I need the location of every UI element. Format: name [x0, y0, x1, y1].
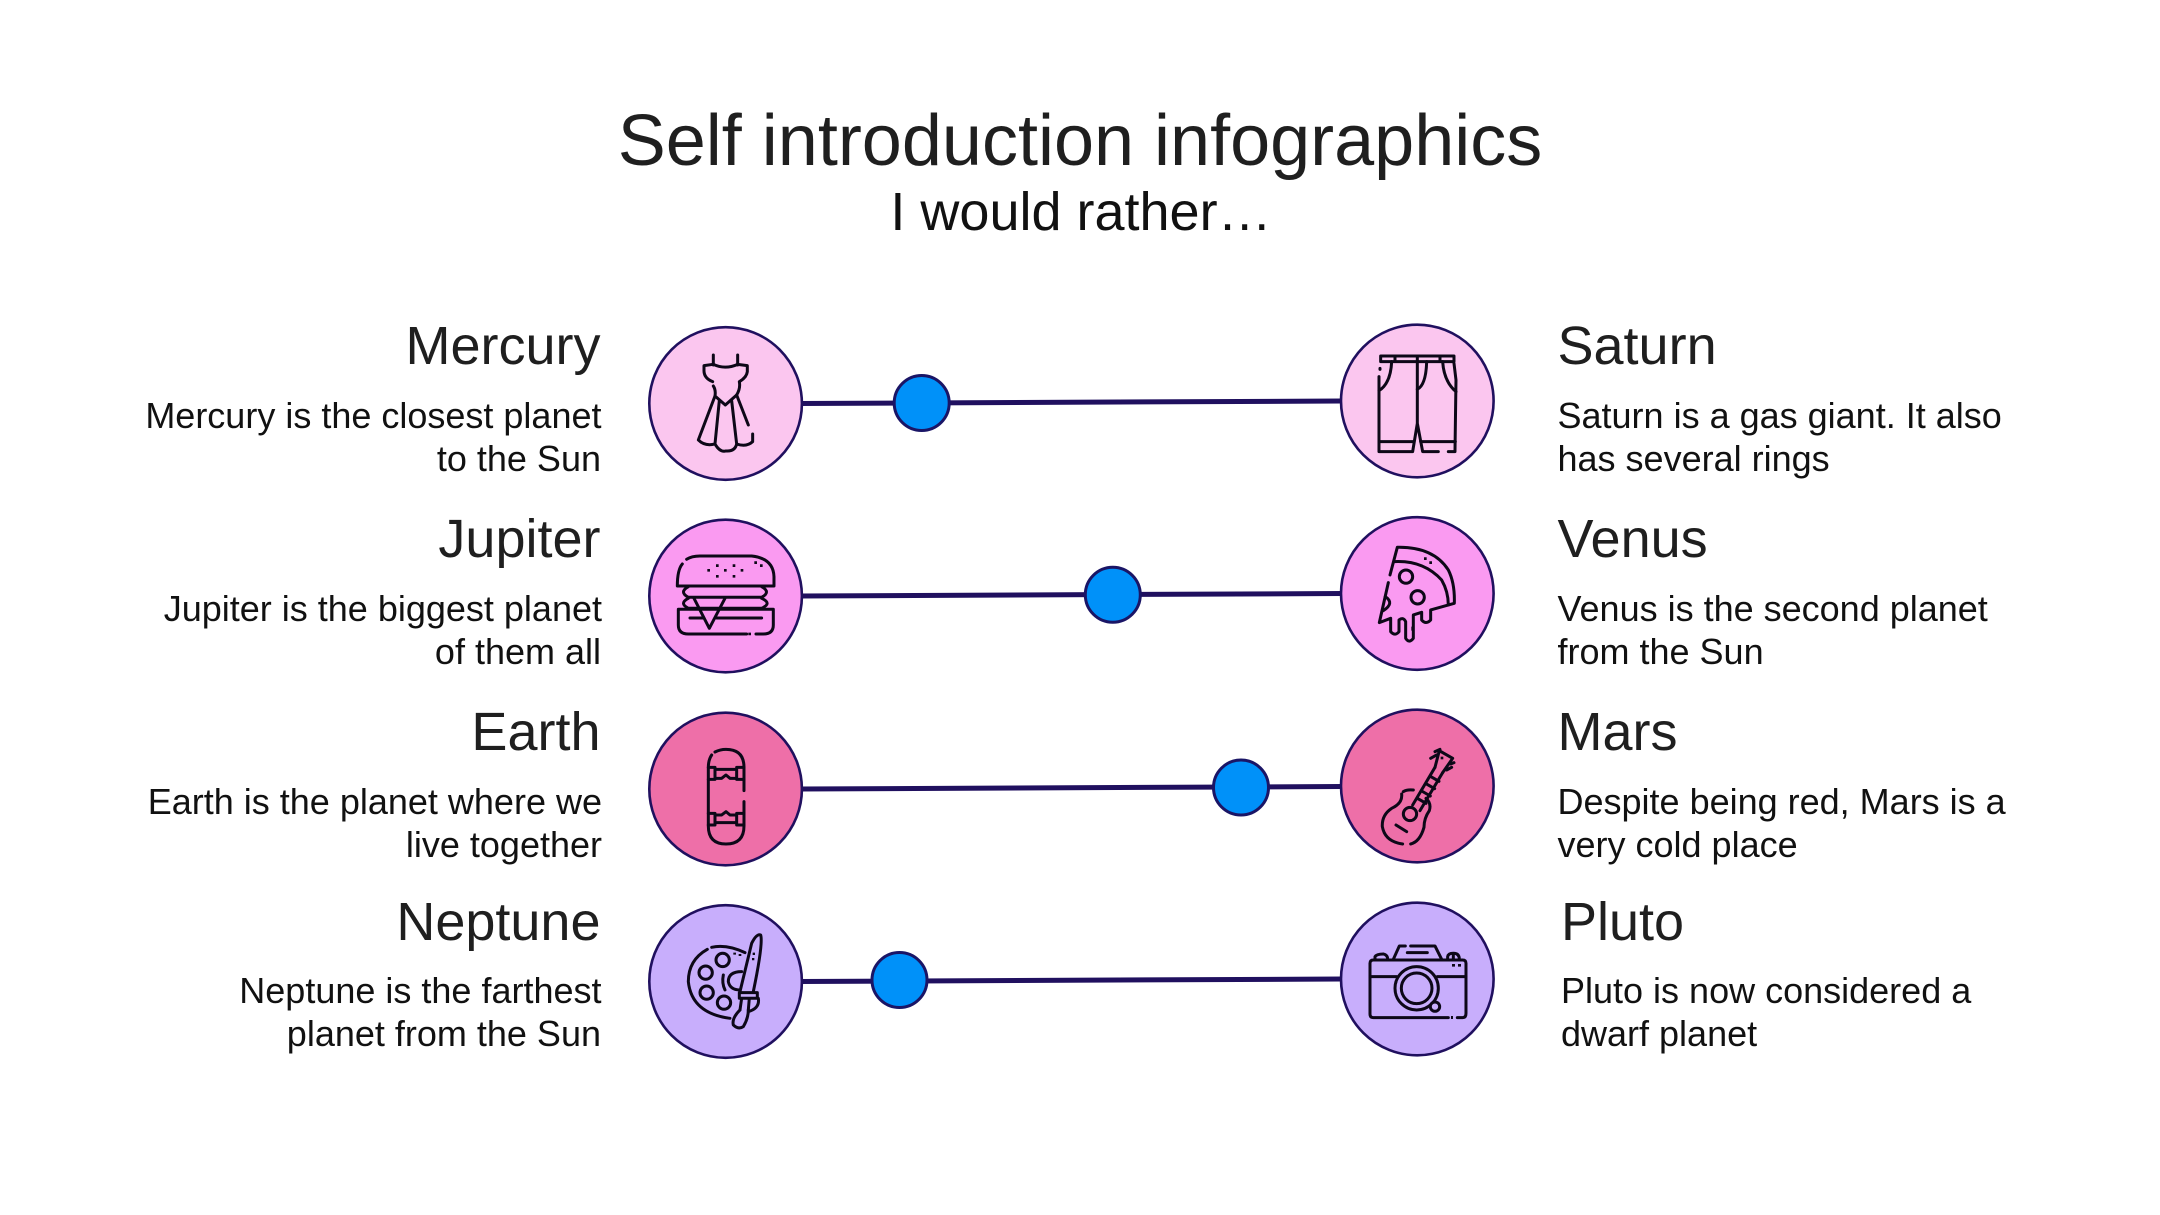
- text block: Mercury: Mercury is the closest planet: [145, 395, 602, 436]
- text block: Mars: Despite being red, Mars is a: [1558, 781, 2007, 822]
- slider line: [800, 786, 1342, 789]
- text block: Venus: Venus is the second planet: [1558, 588, 1988, 629]
- text block: Mercury: to the Sun: [437, 438, 601, 479]
- row: Earth versus Mars: [148, 702, 2007, 865]
- circle: Earth: [649, 713, 802, 865]
- circle: Mars: [1341, 710, 1494, 862]
- text block: Saturn: Saturn: [1558, 316, 1717, 376]
- circle: Saturn: [1341, 325, 1494, 477]
- circle: Venus: [1341, 517, 1494, 670]
- text block: Jupiter: of them all: [435, 631, 601, 672]
- icon: burger: [677, 556, 774, 635]
- slider line: [800, 401, 1342, 404]
- text block: Venus: Venus: [1558, 509, 1708, 569]
- text block: Earth: Earth: [471, 702, 600, 762]
- text block: Earth: live together: [406, 824, 602, 865]
- text block: Pluto: Pluto is now considered a: [1561, 970, 1972, 1011]
- text block: Mars: Mars: [1558, 702, 1678, 762]
- icon: shorts: [1379, 356, 1456, 452]
- text block: Earth: [148, 702, 602, 865]
- text block: Pluto: [1561, 892, 1972, 1054]
- text block: Jupiter: Jupiter is the biggest planet: [164, 588, 602, 629]
- text block: Venus: from the Sun: [1558, 631, 1764, 672]
- circle: Jupiter: [649, 520, 802, 672]
- slider line: [800, 594, 1342, 596]
- circle: Mercury: [649, 327, 802, 480]
- icon: skateboard: [708, 749, 744, 844]
- row: Jupiter versus Venus: [164, 509, 1988, 672]
- text block: Saturn: has several rings: [1558, 438, 1830, 479]
- slider dot: [1214, 760, 1268, 815]
- text block: Jupiter: [164, 509, 602, 672]
- text block: Earth: Earth is the planet where we: [148, 781, 602, 822]
- text block: Pluto: dwarf planet: [1561, 1013, 1757, 1054]
- text block: Neptune: Neptune: [396, 892, 600, 952]
- text block: Venus: [1558, 509, 1988, 672]
- row: Mercury versus Saturn: [145, 316, 2002, 480]
- circle: Pluto: [1341, 903, 1494, 1055]
- text block: Neptune: Neptune is the farthest: [239, 970, 602, 1011]
- slider dot: [894, 376, 949, 430]
- icon: camera: [1370, 946, 1466, 1019]
- icon: paint palette: [688, 935, 761, 1028]
- row: Neptune versus Pluto: [239, 892, 1972, 1058]
- icon: dress: [698, 355, 753, 451]
- slider line: [800, 979, 1342, 982]
- text block: Mars: very cold place: [1558, 824, 1798, 865]
- circle: Neptune: [649, 905, 802, 1058]
- subtitle: I would rather…: [890, 182, 1272, 242]
- slider dot: [1085, 567, 1140, 622]
- text block: Mercury: Mercury: [405, 316, 600, 376]
- text block: Pluto: Pluto: [1561, 892, 1684, 952]
- text block: Saturn: Saturn is a gas giant. It also: [1558, 395, 2002, 436]
- slider dot: [872, 952, 927, 1008]
- icon: guitar: [1382, 749, 1454, 844]
- text block: Saturn: [1558, 316, 2002, 479]
- text block: Jupiter: Jupiter: [438, 509, 601, 569]
- icon: pizza slice: [1379, 547, 1454, 641]
- text block: Mars: [1558, 702, 2007, 865]
- text block: Mercury: [145, 316, 602, 479]
- title: Self introduction infographics: [618, 101, 1542, 181]
- text block: Neptune: [239, 892, 602, 1054]
- text block: Neptune: planet from the Sun: [287, 1013, 601, 1054]
